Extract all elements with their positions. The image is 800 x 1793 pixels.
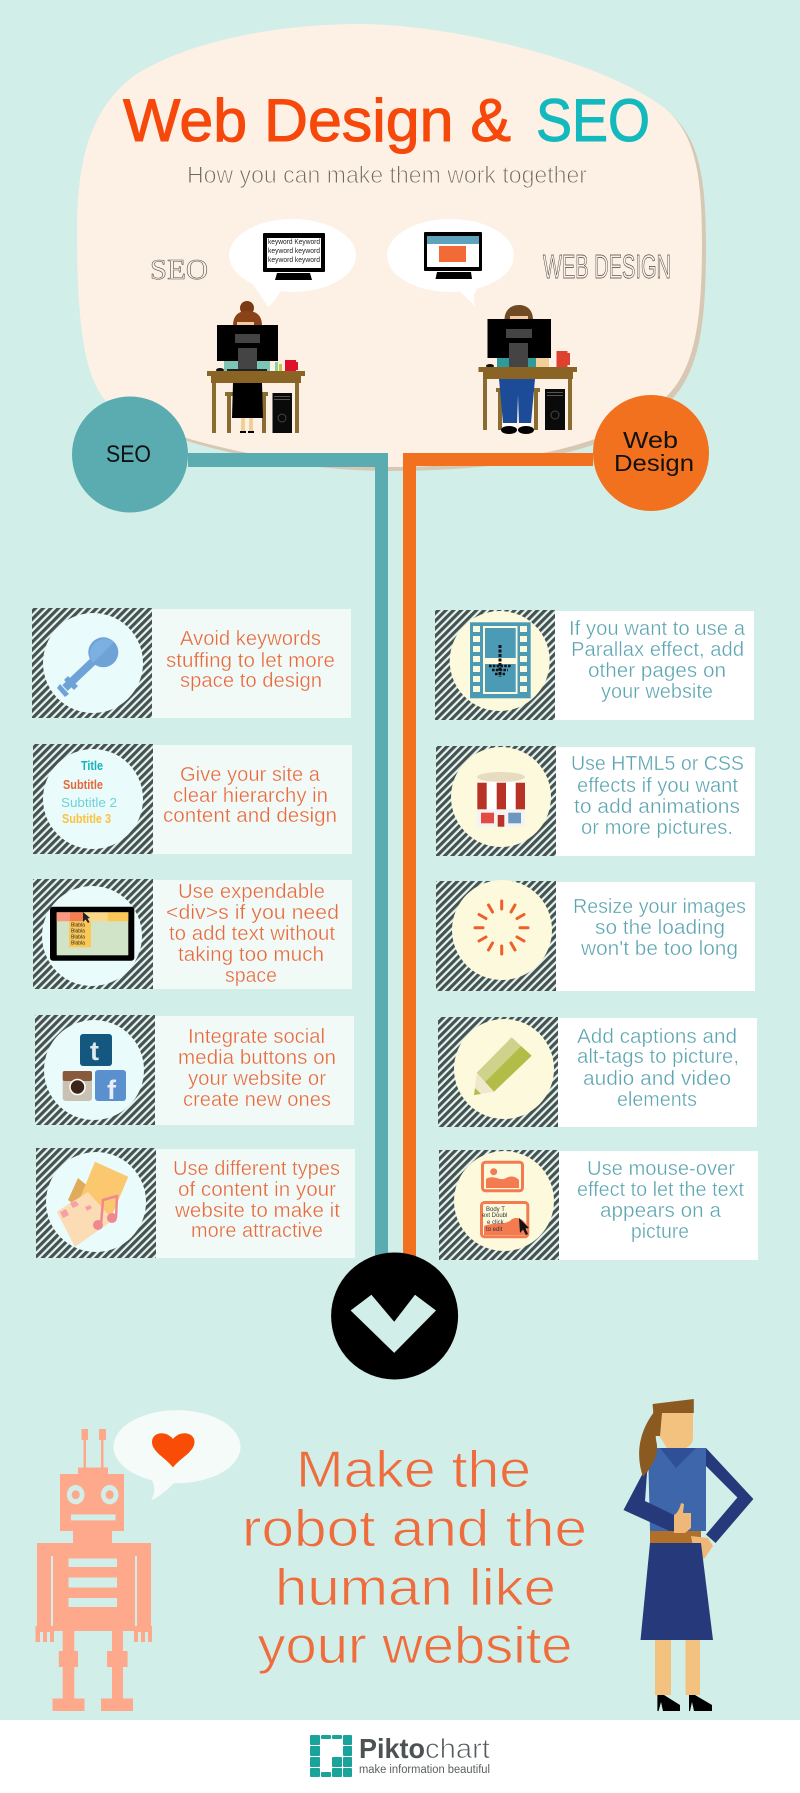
icon: facebook: f [107,1075,117,1105]
closing message: robot and the [242,1500,587,1558]
icon: logo blocks [310,1735,352,1777]
icon: pencil [474,1037,532,1095]
Piktochart logo [310,1733,490,1777]
card: content types [36,1148,355,1258]
speech bubble: web design monitor [387,219,514,307]
orange timeline line [403,453,593,1270]
card: resize images: so the loading [595,917,725,939]
icon: instagram [63,1071,92,1101]
Piktochart logo: make information beautiful [359,1764,490,1776]
card: mouse-over: Use mouse-over [587,1158,735,1180]
SEO woman at desk [207,301,305,433]
title: Web Design & [123,87,511,154]
icon: image with hover text: e click [487,1220,505,1226]
WEB DESIGN outlined label: WEB DESIGN [543,248,671,285]
card: resize images: Resize your images [573,896,746,918]
card: captions: alt-tags to picture, [577,1046,739,1068]
card: social media [35,1015,354,1125]
card: parallax: Parallax effect, add [571,639,744,661]
icon: tablet with dropdown: Blabla [71,922,85,928]
icon: image with hover text: to edit [486,1227,503,1233]
card: captions: elements [617,1089,697,1111]
card: mouse-over: appears on a [600,1200,722,1222]
card: clear hierarchy: content and design [163,805,337,827]
SEO outlined label: SEO [150,254,208,286]
card: parallax: your website [601,681,713,703]
card: mouse-over: effect to let the text [577,1179,744,1201]
teal timeline line [188,453,388,1270]
card: social media: your website or [188,1068,326,1090]
card: content types: website to make it [174,1200,340,1222]
title: SEO [536,87,650,154]
card: expendable divs: Use expendable [178,881,325,903]
closing message [242,1441,587,1675]
card: social media: Integrate social [188,1026,325,1048]
SEO circle: SEO [106,441,151,468]
SEO circle [72,396,188,512]
card: captions [438,1017,757,1127]
card: avoid keywords: space to design [180,670,322,692]
icon: tablet with dropdown: Blabla [71,940,85,946]
web designer at desk [478,305,577,434]
closing message: Make the [296,1441,531,1499]
Piktochart logo: Pikto [359,1733,425,1764]
speech bubble: SEO monitor: keyword keyword [268,255,320,264]
card: social media: create new ones [183,1089,331,1111]
closing message: your website [258,1617,572,1675]
card: parallax: other pages on [588,660,726,682]
card: expendable divs: taking too much [178,944,324,966]
card: content types: of content in your [178,1179,336,1201]
card: captions: audio and video [583,1068,731,1090]
card: mouse-over: picture [631,1221,689,1243]
black circle with chevron [331,1252,458,1380]
card: HTML5 or CSS: Use HTML5 or CSS [571,753,744,775]
icon: tumblr [80,1034,112,1066]
header blob panel [77,24,706,471]
icon: popcorn store [477,772,525,827]
speech bubble: SEO monitor [229,219,356,307]
card: resize images [436,880,755,991]
card: expendable divs: to add text without [169,923,335,945]
card: mouse-over [439,1150,758,1260]
robot [36,1429,152,1711]
card: social media: media buttons on [178,1047,336,1069]
card: clear hierarchy: clear hierarchy in [173,785,328,807]
icon: tablet with dropdown: Blabla [71,928,85,934]
footer band [0,1720,800,1793]
card: avoid keywords: stuffing to let more [166,650,335,672]
speech bubble: SEO monitor: keyword Keyword [268,237,320,246]
icon: text hierarchy: Subtitle 2 [61,795,117,810]
card: HTML5 or CSS: or more pictures. [581,817,733,839]
icon: image with hover text [482,1202,529,1237]
icon: text hierarchy: Subtitle 3 [62,811,111,826]
card: resize images: won't be too long [580,938,738,960]
icon: key [57,637,118,697]
icon: tablet with dropdown: Blabla [71,934,85,940]
card: clear hierarchy: Give your site a [180,764,321,786]
icon: image with hover text: Body T [486,1207,505,1213]
icon: tumblr: t [90,1036,99,1066]
card: expendable divs: <div>s if you need [166,902,339,924]
icon: film strip [470,622,531,698]
Piktochart logo: chart [425,1733,490,1764]
Web Design circle [593,395,709,511]
icon: text hierarchy [61,758,117,826]
card: content types: Use different types [173,1158,340,1180]
card: avoid keywords: Avoid keywords [180,628,321,650]
card: parallax [435,610,754,720]
subtitle: How you can make them work together [187,162,587,189]
icon: loading spinner [475,901,528,954]
card: parallax: If you want to use a [569,618,746,640]
card: HTML5 or CSS: effects if you want [577,775,738,797]
card: expendable divs: space [225,965,277,987]
card: captions: Add captions and [577,1026,737,1048]
Web Design circle: Web [623,427,678,453]
icon: image placeholder [482,1162,522,1191]
icon: facebook [95,1070,126,1105]
speech bubble: heart [114,1410,240,1500]
icon: text hierarchy: Subtitle [63,777,103,792]
icon: content folder with music [57,1162,128,1247]
card: expendable divs [33,879,352,989]
card: clear hierarchy [33,744,352,854]
closing message: human like [275,1559,556,1617]
speech bubble: SEO monitor: keyword keyword [268,246,320,255]
woman with thumb up [624,1399,753,1711]
card: avoid keywords [32,608,351,718]
icon: image with hover text: ext Doubl [482,1213,507,1219]
icon: text hierarchy: Title [81,758,103,773]
card: HTML5 or CSS [436,746,755,856]
icon: tablet with dropdown [50,907,134,961]
Web Design circle: Design [614,450,694,476]
card: content types: more attractive [191,1220,323,1242]
card: HTML5 or CSS: to add animations [574,796,740,818]
